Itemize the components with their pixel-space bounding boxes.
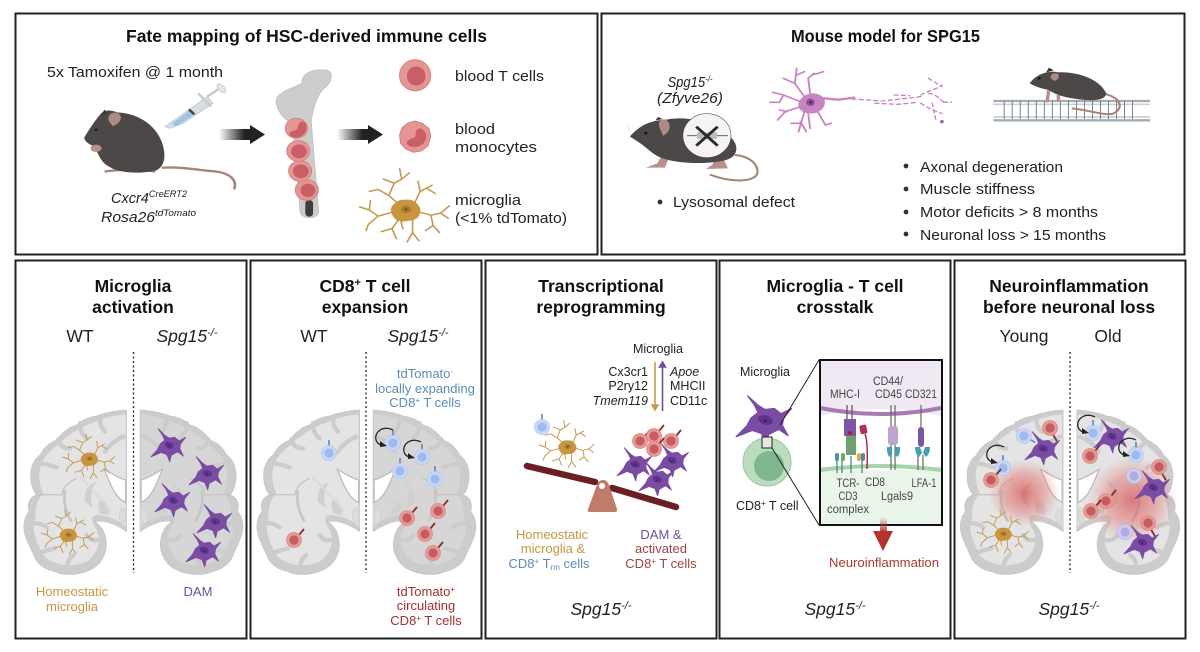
icon: knockout mouse [627,114,757,180]
label: homeostatic side [509,527,590,572]
icon: blood T cell [400,60,431,91]
icon: seesaw [527,466,676,512]
label: genotype: -/- [1089,600,1100,612]
heading: microglia activation: Microglia [95,276,172,296]
label: circulating T cells: T cells [421,613,462,628]
heading: fate mapping: Fate mapping of HSC-derived immune cells [126,26,487,46]
icon: microglia contacting T cell [736,396,791,444]
label: locally expanding T cells: + [415,396,420,405]
icon: zoom markers [762,360,819,525]
heading: neuroinflammation before neuronal loss [983,276,1155,317]
label: T cell: + [761,499,766,508]
MHC-I and TCR complex [835,405,865,473]
label: locally expanding T cells: tdTomato [397,366,450,381]
label: activated side: + [651,557,656,566]
gene list: microglia markers: P2ry12 [608,379,648,393]
icon: homeostatic side cells [534,414,594,467]
icon: T cell [743,438,791,486]
label: homeostatic side: CD8 [509,556,535,571]
inset labels: CD44/ [873,376,904,388]
label: genotype: Spg15 [1038,599,1089,619]
icon: young cells [977,418,1063,553]
heading: crosstalk: crosstalk [797,297,874,317]
label: activated side [625,527,697,571]
panel: mouse model for SPG15 [602,14,1184,254]
icon: sitting mouse [84,110,235,188]
label: microglia: microglia [455,192,522,209]
label: circulating T cells: tdTomato [397,584,450,599]
icon: homeostatic microglia [42,434,115,555]
inset labels: Lgals9 [881,491,913,503]
heading: transcriptional reprogramming: reprogramming [536,297,666,317]
label: WT: WT [300,326,328,346]
icon: T cells [286,440,336,548]
label: tamoxifen regimen: 5x Tamoxifen @ 1 month [47,64,223,81]
label: old: Old [1094,326,1122,346]
brain: young hemisphere [960,410,1063,575]
label: homeostatic side: T [539,556,551,571]
brain: knockout hemisphere with T cells [373,410,476,575]
heading: microglia activation: activation [92,297,174,317]
gene list: microglia markers: CD11c [670,394,707,408]
heading: mouse model: Mouse model for SPG15 [791,26,980,46]
label: blood monocytes: blood [455,121,495,138]
label: T cell: T cell [766,499,799,513]
label: activated side: T cells [656,556,697,571]
label: locally expanding T cells: T cells [420,395,461,410]
CD321 and LFA-1 [915,405,930,470]
label: Spg15 knockout: -/- [438,327,449,339]
list: phenotypes [904,159,1106,244]
label: WT: WT [66,326,94,346]
label: circulating T cells: + [450,585,455,594]
gene list: microglia markers: Microglia [633,342,683,356]
label: T cell: CD8 [736,499,761,513]
label: neuroinflammation: Neuroinflammation [829,555,939,570]
label: locally expanding T cells: CD8 [389,395,415,410]
icon: degenerating neuron [770,68,951,132]
gene list: microglia markers: Tmem119 [593,394,648,408]
icon: syringe [165,83,228,128]
inset: immune synapse [820,360,942,525]
label: homeostatic side: cells [560,556,590,571]
label: young: Young [1000,326,1048,346]
panel: fate mapping of HSC-derived immune cells [16,14,598,254]
list: phenotypes: Neuronal loss > 15 months [920,227,1106,244]
label: circulating T cells: circulating [397,598,455,613]
inset labels: LFA-1 [912,478,936,490]
label: knockout genotype: Spg15 [668,74,711,91]
label: locally expanding T cells [375,366,475,410]
icon: microglia [360,169,449,242]
brain: knockout hemisphere with DAM [140,410,243,575]
list: lysosomal defect: Lysosomal defect [673,194,796,211]
inset labels: CD45 [875,389,902,401]
gene list: microglia markers: Cx3cr1 [608,365,648,379]
label: genotype: -/- [621,600,632,612]
heading: crosstalk [766,276,904,317]
inset labels: MHC-I [830,389,860,401]
label: homeostatic microglia [36,584,109,614]
brain: wild-type hemisphere [24,410,127,575]
label: mouse genotype: Cxcr4 [111,190,150,207]
label: DAM: DAM [184,584,212,599]
inset labels [827,376,937,516]
label: circulating T cells: CD8 [390,613,416,628]
inset labels: CD8 [865,477,885,489]
label: homeostatic side: + [535,557,540,566]
list: phenotypes: Motor deficits > 8 months [920,204,1098,221]
arrow: mouse to bone marrow [219,125,265,144]
label: Spg15 knockout: Spg15 [388,326,438,346]
icon: old cells [1078,415,1172,559]
label: mouse genotype: CreERT2 [149,189,188,200]
panel: microglia - T cell crosstalk [720,260,950,638]
arrow: down-regulated [652,362,658,410]
heading: CD8 T cell expansion: T cell [361,276,411,296]
label: homeostatic side: rm [551,563,560,572]
inset labels: TCR- [836,478,860,490]
arrow: up-regulated [660,362,666,411]
label: genotype: Spg15 [804,599,855,619]
label: locally expanding T cells: locally expanding [375,381,475,396]
label: genotype: Spg15 [570,599,621,619]
heading: CD8 T cell expansion [319,276,411,317]
list: phenotypes: Muscle stiffness [920,181,1035,198]
CD8 [859,424,868,469]
icon: expanding T cells [376,428,442,486]
icon: disease-associated microglia [151,429,232,567]
CD44/CD45 and Lgals9 [887,405,900,470]
label: homeostatic side: microglia & [521,541,585,556]
heading: transcriptional reprogramming: Transcriptional [538,276,664,296]
heading: CD8 T cell expansion: + [354,277,361,289]
arrow: to neuroinflammation [873,517,893,551]
label: homeostatic microglia: Homeostatic [36,584,109,599]
panel: neuroinflammation before neuronal loss [954,260,1186,638]
brain: wild-type hemisphere [257,410,360,575]
label: genotype: -/- [855,600,866,612]
gene list: microglia markers [593,342,707,408]
label: knockout genotype [657,74,723,107]
inset labels: complex [827,504,869,516]
label: circulating T cells [390,584,462,628]
icon: circulating T cells [400,500,448,560]
label: blood monocytes [455,121,537,156]
label: blood monocytes: monocytes [455,139,537,156]
label: microglia: (<1% tdTomato) [455,210,567,227]
label: homeostatic side: Homeostatic [516,527,589,542]
label: mouse genotype: tdTomato [155,208,196,219]
label: homeostatic microglia: microglia [46,599,99,614]
heading: CD8 T cell expansion: CD8 [319,276,354,296]
gene list: microglia markers: MHCII [670,379,705,393]
label: activated side: CD8 [625,556,651,571]
label: activated side: activated [635,541,687,556]
icon: mouse on rotarod [993,68,1150,120]
panel: microglia activation [16,260,246,638]
list: phenotypes: Axonal degeneration [920,159,1063,176]
icon: blood monocyte [400,121,431,152]
inset labels: CD321 [905,389,937,401]
heading: microglia activation [92,276,174,317]
heading: transcriptional reprogramming [536,276,666,317]
label: knockout genotype: (Zfyve26) [657,90,723,107]
gene list: microglia markers: Apoe [669,365,699,379]
label: Spg15 knockout: -/- [207,327,218,339]
label: knockout genotype: -/- [705,74,712,84]
panel: transcriptional reprogramming [486,260,716,638]
icon: activated side cells [617,425,689,496]
label: microglia [455,192,567,227]
heading: CD8 T cell expansion: expansion [322,297,408,317]
inset labels: CD3 [838,491,858,503]
panel: CD8+ T cell expansion [250,260,482,638]
label: locally expanding T cells: - [450,367,453,376]
heading: neuroinflammation before neuronal loss: Neuroinflammation [989,276,1149,296]
brain: old hemisphere [1077,410,1180,575]
label: microglia: Microglia [740,365,790,379]
label: blood T cells: blood T cells [455,68,544,85]
heading: neuroinflammation before neuronal loss: before neuronal loss [983,297,1155,317]
label: Spg15 knockout: Spg15 [156,326,207,346]
label: activated side: DAM & [640,527,682,542]
arrow: bone marrow to blood [337,125,383,144]
label: mouse genotype [101,189,196,226]
icon: femur with marrow cells [276,70,331,218]
heading: crosstalk: Microglia - T cell [766,276,904,296]
label: mouse genotype: Rosa26 [101,209,153,226]
label: circulating T cells: + [416,614,421,623]
